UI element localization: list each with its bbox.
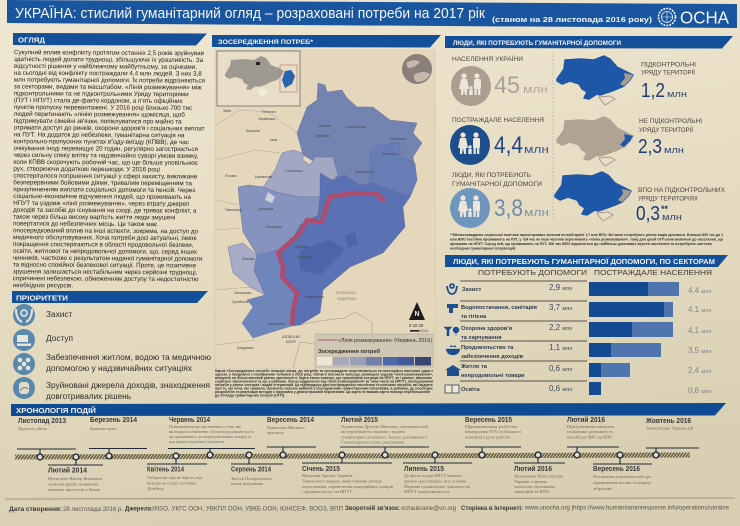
event: August 2014: плану реагування: [231, 482, 263, 486]
stat: people in need: млн: [524, 207, 549, 219]
event: June 2014: для наданої кризової допомоги: [169, 440, 224, 444]
text block: overview body: спостерігалося погіршення ситуації у сфері захисту, викликане: [13, 172, 198, 180]
event: January 2015: [302, 465, 393, 494]
heading: focus of needs: [212, 35, 441, 48]
map caption: [215, 369, 433, 398]
footer: Дата створення:: [9, 506, 62, 513]
map: place labels: Старобільськ: [345, 125, 367, 129]
text: non-government controlled area: УРЯДУ ТЕРИТОРІЇ: [639, 127, 693, 134]
event: October 2016: Антисепідна Україна дій: [646, 426, 693, 430]
icon: north arrow and scale: [409, 302, 428, 332]
event: June 2014: [169, 417, 254, 444]
footnote: млн ВПО постійно проживають на ПУТ, у той час як інша частина перетинають «лінію розмежування», тому для цілей ОГП вони включені до населення, що: [450, 238, 723, 242]
text: protection: Захист: [46, 309, 73, 319]
map caption: одною, у поєднанні з отриманими точками у 2016 році. Області високого кольору, розміщені уздовж «лінії розмежування»,: [215, 372, 433, 376]
map background: [215, 50, 435, 368]
event: February 2014: залишив країну зникнення: [48, 482, 98, 486]
icon: book: [445, 385, 459, 393]
map: place labels: Бердянськ: [237, 346, 254, 350]
text block: overview body: НПУТ та уздовж «лінії розмежування», через втрату джерел: [13, 199, 190, 208]
event: February 2016 top: Лютий 2016: [567, 416, 605, 424]
map: place labels: Лозова: [225, 174, 236, 178]
footer: [5, 498, 735, 513]
event: September 2014: протоколу: [267, 431, 284, 435]
event: February 2016 bottom: Заснування Міністерства: [514, 474, 563, 478]
stat: affected population: ПОСТРАЖДАЛЕ НАСЕЛЕННЯ: [452, 118, 544, 124]
text: displaced people: ВПО НА ПІДКОНТРОЛЬНИХ: [638, 188, 725, 194]
icon: tap: [447, 304, 458, 313]
heading: people in need: [445, 36, 733, 48]
event: February 2016 bottom: територій та ВПО: [514, 490, 549, 494]
event: March 2014: Березень 2014: [90, 417, 137, 424]
event: February 2016 bottom: Лютий 2016: [514, 465, 552, 473]
text block: overview body: чинників, частково є результатом наданої гуманітарної допомоги: [13, 254, 203, 263]
event: February 2014: [48, 466, 102, 492]
row: water and sanitation: Водопостачання, санітарія: [461, 305, 537, 311]
map legend: Зосередження потреб: [318, 348, 381, 355]
event: February 2015: Підписання Другою Мінських домовленостей,: [341, 425, 429, 430]
text block: overview body: опосередкований вплив на інші аспекти, зокрема, на доступ до: [13, 226, 199, 235]
column headers: ПОТРЕБУЮТЬ ДОПОМОГИ: [478, 268, 587, 277]
footer: ochaukraine@un.org: [401, 505, 456, 512]
row: water and sanitation: [447, 301, 711, 320]
event: January 2015: і надання послуг на НПУТ: [302, 490, 353, 494]
text block: overview body: доходів та засобів до існування на сході, де триває конфлікт, а: [13, 206, 197, 215]
map: place labels: [223, 109, 406, 350]
map: place labels: Слов'янськ: [285, 169, 303, 173]
event: September 2014: Підписання Мінського: [267, 426, 305, 430]
map caption: потреби у різних секторах і видах інтервенцій. Це підтверджує дані постраждалого населення та пов'язані потреби, які свідчать: [215, 383, 433, 387]
text block: overview body: очікування іноді перевищує 20 годин, регулярно загострюється: [13, 144, 198, 153]
text: displaced people: УРЯДУ ТЕРИТОРІЯХ: [638, 196, 698, 202]
map: place labels: Міловатка: [390, 137, 406, 141]
event: April 2014: [147, 466, 202, 491]
text: displaced people: млн: [662, 212, 682, 223]
event: September 2016: припинення вогню та відвод: [593, 481, 651, 485]
column headers: ПОСТРАЖДАЛЕ НАСЕЛЕННЯ: [594, 268, 712, 277]
stat: people in need: [450, 173, 549, 228]
text: emergency aid: Забезпечення житлом, водою та медичною: [46, 352, 211, 362]
map: place labels: Павлоград: [225, 208, 242, 212]
text: access: Доступ: [46, 333, 73, 343]
event: July 2015: [404, 466, 470, 494]
event: April 2014: Озброєнні групи беруть під: [147, 476, 202, 480]
event: February 2015: Гуманітарного плану реагування: [341, 440, 404, 444]
panel: people in need: [445, 36, 733, 250]
row: health and nutrition: 2,2 млн: [549, 323, 572, 332]
event: June 2014: що проживають до непрограмованих заходів та: [169, 435, 251, 439]
map: displaced people: [555, 172, 631, 221]
heading: timeline: [11, 403, 726, 416]
title banner: [7, 0, 737, 28]
event: October 2016: Жовтень 2016: [645, 418, 691, 425]
text block: overview body: отримати доступ до ринків, охорони здоров'я і соціальних виплат: [14, 124, 205, 133]
panel: overview: [13, 33, 207, 290]
stat: population of Ukraine: млн: [523, 84, 548, 96]
row: water and sanitation: 4,1 млн: [688, 305, 711, 314]
row: health and nutrition: Охорона здоров'я: [461, 326, 512, 332]
map: place labels: РОСІЙСЬКА: [336, 291, 356, 295]
map: needs severity regions: [228, 83, 422, 338]
stat: people in need: ЛЮДИ, ЯКІ ПОТРЕБУЮТЬ: [452, 173, 531, 179]
event: June 2014: які вводяться обмеження і обстріли продовжуються та: [169, 430, 254, 434]
event: April 2014: контроль сході частини: [147, 482, 196, 486]
icon: emergency aid: [13, 353, 35, 375]
footer: 28 листопада 2016 р.: [63, 506, 123, 513]
event: February 2015: Лютий 2015: [341, 416, 378, 424]
heading: priorities: [12, 291, 208, 303]
heading: overview: ОГЛЯД: [18, 36, 46, 44]
event: February 2015: [341, 416, 429, 444]
row: food and livelihoods: [446, 341, 711, 360]
row: food and livelihoods: Продовольство та: [461, 345, 514, 351]
event: February 2014: Лютий 2014: [48, 466, 87, 474]
title banner: (станом на 28 листопада 2016 року): [492, 15, 653, 24]
text block: overview body: на ПУТ. На додаток до небезпеки, гуманітарна ситуація на: [14, 130, 185, 139]
text: government controlled area: млн: [667, 89, 687, 100]
stat: population of Ukraine: [451, 56, 548, 106]
timeline event bars above and below axis: [17, 447, 699, 465]
map: place labels: Сватове: [318, 124, 331, 128]
row: shelter and NFI: [445, 361, 711, 379]
text: non-government controlled area: млн: [664, 145, 684, 156]
text: livelihoods: довготривалих рішень: [46, 391, 131, 401]
event: September 2014: Вересень 2014: [267, 417, 314, 424]
text block: overview body: людей перетинають «лінію розмежування» щомісяця, щоб: [14, 110, 185, 119]
text block: overview body: Сукупний вплив конфлікту протягом останніх 2,5 років зруйнував: [14, 48, 205, 57]
event: September 2015: міжнародних НУО та більшості: [465, 430, 521, 434]
row: education: [445, 381, 711, 395]
event: June 2014: Повноваження про призначення в січні, яке: [169, 425, 241, 430]
text block: overview body: та відносно спокійної безпекової ситуації. Проте, це позитивне: [13, 261, 197, 269]
footnote: **Мінпостраждалих соціальної політики зареєстровано загалом по всій країні 1,7 млн ВПО. Всі вони потребують різних видів допомоги. Близько 800 тис до 1: [450, 233, 723, 237]
row: shelter and NFI: Житло та: [460, 364, 488, 370]
row: health and nutrition: 4,1 млн: [688, 326, 711, 335]
text: non-government controlled area: [638, 119, 702, 158]
text: government controlled area: [641, 62, 696, 102]
text: government controlled area: 1,2: [641, 80, 665, 102]
text block: overview body: соціально-економічне відчуження людей, що проживають на: [13, 192, 191, 201]
event: October 2016: [645, 418, 693, 430]
event: February 2014: Президент Віктор Янукович: [48, 477, 102, 481]
stat: people in need: 3,8: [494, 195, 523, 222]
map: place labels: Луганська: [382, 152, 398, 156]
row: water and sanitation: 3,7 млн: [549, 303, 572, 312]
map: place labels: Донецьк: [298, 255, 312, 259]
text block: overview body: також через більш високу вартість життя люди змушені: [13, 213, 175, 221]
event: July 2015: Де-факто влади НПУТ вимагає: [404, 474, 462, 478]
row: protection: 2,9 млн: [549, 283, 572, 292]
icon: access: [13, 329, 35, 351]
event: September 2016: Вересень 2016: [593, 466, 640, 473]
text: emergency aid: допомогою у надзвичайних ситуаціях: [46, 363, 193, 373]
footnote: [450, 233, 723, 250]
text block: overview body: млн потребують гуманітарної допомоги. Їх потреби відрізняються: [14, 76, 205, 85]
text block: overview body: відсутності рішення у найближчому майбутньому, за оцінками,: [14, 62, 197, 71]
footer: www.unocha.org |https://www.humanitarianresponse.info/operations/ukraine: [524, 504, 730, 512]
map caption: Карта «Зосередження потреб» показує місця, де потреби та постраждале перетинаються та потенційно пов'язані одна з: [215, 369, 433, 373]
icon: protection: [447, 284, 457, 294]
row: water and sanitation: та гігієна: [461, 314, 487, 320]
row: protection: Захист: [462, 287, 482, 293]
stat: affected population: 4,4: [494, 132, 523, 159]
map: place labels: Покровськ: [266, 225, 283, 229]
event: September 2015: [465, 417, 521, 440]
row: shelter and NFI: непродовольчі товари: [461, 373, 525, 379]
event: January 2015: Введення Урядом України: [302, 474, 352, 478]
icon: north arrow and scale: 0 10 20: [409, 323, 424, 328]
panel: timeline: [11, 403, 726, 494]
map: place labels: Кремінна: [315, 134, 330, 138]
row: food and livelihoods: 1,1 млн: [549, 343, 572, 352]
row: food and livelihoods: забезпечення доходів: [461, 353, 524, 360]
map: place labels: Ізюм: [270, 138, 278, 142]
text block: overview body: через сильну спеку влітку та надзвичайно суворі умови взимку,: [13, 151, 199, 160]
event: January 2015: пересування, перевезення комерційних товарів: [302, 485, 393, 490]
event: February 2016 top: пенсій для ЧНУ на ВПО: [567, 436, 612, 440]
text: emergency aid: [46, 352, 211, 373]
map: place labels: Печеніги: [262, 110, 276, 114]
map legend: [315, 334, 433, 367]
timeline nodes: [37, 452, 659, 460]
text block: overview body: контрольно-пропускних пунктах в'їзду-виїзду (КПВВ), де час: [14, 138, 189, 146]
event: February 2016 bottom: України з питань: [514, 480, 547, 484]
heading: timeline: ХРОНОЛОГІЯ ПОДІЙ: [16, 406, 96, 415]
text block: overview body: коли КПВВ скорочують робочий час, що ще більше уповільнює: [13, 158, 199, 167]
event: February 2015: гуманітарної допомоги. Запуск доповненого: [341, 436, 427, 440]
event: November 2013: Листопад 2013: [18, 418, 66, 425]
text: displaced people: **: [661, 204, 669, 214]
text block: overview body: безперервними бойовими діями, тривалим переміщенням та: [13, 178, 192, 187]
event: July 2015: Липень 2015: [404, 466, 444, 473]
map: place labels: Балаклія: [246, 129, 260, 133]
text: livelihoods: [46, 380, 210, 401]
icon: food bowl: [446, 346, 460, 355]
map caption: серйозне занепокоєння та що у районах, більш віддалених від «лінії розмежування» (в тому числі на НПУТ), послідовними: [215, 380, 433, 384]
map: place labels: Зміїв: [223, 109, 231, 113]
event: February 2014: масових протестів у Києві: [48, 488, 100, 492]
icon: livelihoods: [13, 377, 35, 399]
footer: Джерела:: [125, 506, 153, 512]
text block: overview body: рух, створюючи додаткові перешкоди. У 2016 році: [13, 165, 160, 173]
row: education: 0,6 млн: [688, 386, 711, 395]
event: September 2016: [593, 466, 651, 491]
text block: overview body: зрушення залишається нестабільним через серйозні труднощі,: [13, 267, 198, 276]
event: February 2016 bottom: [514, 465, 563, 494]
text: livelihoods: Зруйновані джерела доходів, знаходження: [46, 380, 210, 390]
map caption: вказують на більш високий рівень критичності. Карта також показує, що гуманітарна ситуація на НПУТ, як і раніше, викликає: [215, 376, 432, 380]
text block: overview body: на сьогодні від конфлікту постраждали 4,4 млн людей. З них 3,8: [14, 69, 202, 78]
text block: overview body: освіти, житлової та непродовольчої допомоги, що, серед інших: [13, 247, 198, 256]
row: food and livelihoods: 3,5 млн: [688, 346, 711, 355]
footer: Сторінка в Інтернеті:: [461, 505, 523, 512]
map: place labels: Барвінкове: [255, 175, 273, 179]
text block: overview body: підтримувати сімейні зв'язки, попіклуватися про майно та: [14, 117, 182, 126]
map: place labels: Гуляйполе: [232, 300, 249, 304]
column headers: [478, 268, 712, 277]
event: November 2013: [18, 418, 66, 431]
row: health and nutrition: [444, 321, 711, 341]
event: June 2014: Червень 2014: [169, 417, 210, 424]
event: August 2014: Серпень 2014: [231, 466, 271, 474]
map: place labels: Донецька: [258, 207, 273, 211]
icon: globe: [402, 54, 432, 84]
row: protection: [447, 281, 711, 296]
map caption: про те, що хоча, які тривали, посилить перелік районів з послідовними гуманітарними потребами, а районах, де необхідне: [215, 386, 433, 390]
icon: north arrow and scale: N: [414, 311, 420, 318]
icon: house: [445, 365, 461, 376]
stat: affected population: млн: [524, 144, 549, 156]
event: September 2015: Припинення роботи: [465, 425, 517, 429]
map: place labels: Запорізька: [234, 291, 251, 295]
text block: overview body: повертатися до небезпечних місць. Це також має: [13, 219, 158, 228]
map: place labels: Горлівка: [295, 245, 308, 249]
event: February 2016 top: [567, 416, 614, 440]
event: January 2015: Січень 2015: [302, 465, 340, 473]
row: protection: 4,4 млн: [688, 286, 711, 295]
text block: overview body: підконтрольними та не підконтрольними Уряду територіями: [14, 89, 189, 98]
event: September 2015: Вересень 2015: [465, 417, 512, 424]
map: place labels: АЗОВСЬКЕ: [282, 335, 301, 339]
event: September 2014: [267, 417, 314, 435]
map: place labels: Харківська: [258, 117, 275, 121]
map: place labels: Амвросіївка: [305, 295, 324, 299]
map: place labels: Маріуполь: [268, 322, 285, 326]
stat: people in need: ГУМАНІТАРНОЇ ДОПОМОГИ: [452, 181, 542, 188]
text: displaced people: 0,3: [636, 203, 660, 225]
row: shelter and NFI: 2,4 млн: [688, 366, 711, 375]
event: September 2016: зброєю: [593, 487, 612, 491]
text block: overview body: призупиненням виплати соціальної допомоги та пенсій. Через: [13, 185, 195, 194]
text: non-government controlled area: НЕ ПІДКОНТРОЛЬНІ: [639, 119, 702, 125]
event: February 2016 bottom: тимчасово окупованих: [514, 485, 555, 489]
row: education: Освіта: [461, 387, 480, 393]
event: April 2014: Квітень 2014: [147, 466, 184, 474]
map: place labels: Лисичанськ: [355, 170, 374, 174]
text block: overview body: спричинені небезпекою, обмеженням доступу та недостатністю: [13, 274, 199, 283]
stat: population of Ukraine: НАСЕЛЕННЯ УКРАЇНИ: [452, 56, 523, 63]
panel: people in need by sector: [444, 255, 728, 395]
event: March 2014: Кримська криза: [90, 427, 117, 431]
event: July 2015: зрізити «реєстрацію» всіх установ: [404, 480, 466, 484]
event: September 2016: Положення домовленостей про: [593, 475, 651, 479]
heading: priorities: ПРІОРИТЕТИ: [16, 294, 68, 302]
map: place labels: МОРЕ: [286, 340, 297, 344]
map: non-government controlled area: [557, 117, 633, 166]
event: July 2015: НПУТ призупиняється: [404, 490, 449, 494]
title banner: OCHA: [680, 8, 729, 28]
footnote: проживає на НПУТ. Серед ней, що проживають на ПУТ, 300 тис ВПО відносяться до найбільш уразливих верств населення та потребують життєво: [450, 242, 712, 246]
map: inset Ukraine locator: [217, 51, 300, 106]
text: non-government controlled area: 2,3: [638, 136, 662, 158]
map: borders: [216, 110, 372, 368]
text block: overview body: необхідних ресурсів.: [13, 281, 73, 289]
text: government controlled area: УРЯДУ ТЕРИТОРІЇ: [641, 70, 695, 76]
text block: overview body: (ПУТ і НПУТ) стала де-факто кордоном, а п'ять офіційних: [14, 96, 184, 105]
text block: overview body: здатність людей долати труднощі, збільшуючи їх уразливість. За: [14, 55, 204, 64]
heading: by sector: ЛЮДИ, ЯКІ ПОТРЕБУЮТЬ ГУМАНІТАРНОЇ ДОПОМОГИ, ПО СЕКТОРАМ: [453, 257, 715, 266]
timeline axis: [15, 452, 690, 460]
event: September 2015: наземного руху роботи: [465, 436, 510, 440]
footnote: необхідних гуманітарних інтервенцій.: [450, 246, 516, 250]
heading: overview: [13, 33, 207, 46]
text block: overview body: пунктів пропуску перевантажені. У 2016 році близько 700 тис: [14, 103, 192, 112]
title banner: УКРАЇНА: стислий гуманітарний огляд – розраховані потреби на 2017 рік: [15, 5, 486, 22]
footer: Зворотній зв'язок:: [345, 505, 400, 512]
icon: protection: [13, 304, 35, 326]
text: displaced people: [636, 188, 725, 225]
map: contact line: [278, 193, 383, 323]
map caption: до Огляду гуманітарних потреб (ОГП).: [215, 394, 285, 398]
text: government controlled area: ПІДКОНТРОЛЬНІ: [641, 62, 696, 68]
map: place labels: ФЕДЕРАЦІЯ: [337, 297, 357, 301]
heading: people in need: ЛЮДИ, ЯКІ ПОТРЕБУЮТЬ ГУМАНІТАРНОЇ ДОПОМОГИ: [453, 39, 621, 47]
row: health and nutrition: та харчування: [461, 335, 501, 341]
event: August 2014: [231, 466, 272, 486]
row: shelter and NFI: 0,6 млн: [549, 364, 572, 373]
event: March 2014: [90, 417, 137, 431]
heading: by sector: [445, 255, 728, 267]
event: August 2014: Запуск Попереднього: [231, 477, 272, 481]
text block: overview body: медичного обслуговування. Хоча потреби досі актуальні, певні: [13, 233, 197, 242]
text block: overview body: за секторами, видами та масштабом. «Лінія розмежування» між: [14, 82, 202, 91]
footer: INSO, УКГС ООН, УВКПЛ ООН, УВКБ ООН, ЮНІСЕФ, ВООЗ, ВПП: [153, 506, 343, 512]
heading: focus of needs: ЗОСЕРЕДЖЕННЯ ПОТРЕБ*: [218, 39, 313, 46]
map: government controlled area: [557, 56, 633, 105]
event: July 2015: Надання гуманітарної допомоги на: [404, 485, 470, 489]
event: February 2015: які передбачають сприяння у наданні: [341, 430, 405, 434]
panel: needs map: [212, 35, 441, 398]
stat: population of Ukraine: 45: [494, 72, 520, 99]
icon: health: [444, 327, 459, 336]
text block: overview body: [13, 48, 205, 290]
map caption: розроблене та реалізація методів з підтримки у довгостроковій перспективі. Ця карта не вважає карти показує перебільшення: [215, 390, 430, 394]
event: April 2014: Донбасу: [147, 487, 164, 491]
event: January 2015: Тимчасового порядку, який обмежив свободу: [302, 480, 382, 484]
map: place labels: Межова: [242, 257, 255, 261]
panel: priorities: [12, 291, 211, 401]
text block: overview body: покращення спостерігаються в області продовольчої безпеки,: [13, 240, 194, 249]
stat: affected population: [450, 118, 549, 165]
row: education: 0,6 млн: [549, 384, 572, 393]
event: November 2013: Протести у Києві: [18, 427, 47, 431]
event: February 2016 top: соціальної допомоги та: [567, 430, 613, 434]
map legend: «Лінія розмежування» (Червень 2016): [338, 338, 432, 344]
icon: UN emblem: [658, 8, 676, 26]
event: February 2016 top: Призупинення виплати: [567, 425, 614, 429]
